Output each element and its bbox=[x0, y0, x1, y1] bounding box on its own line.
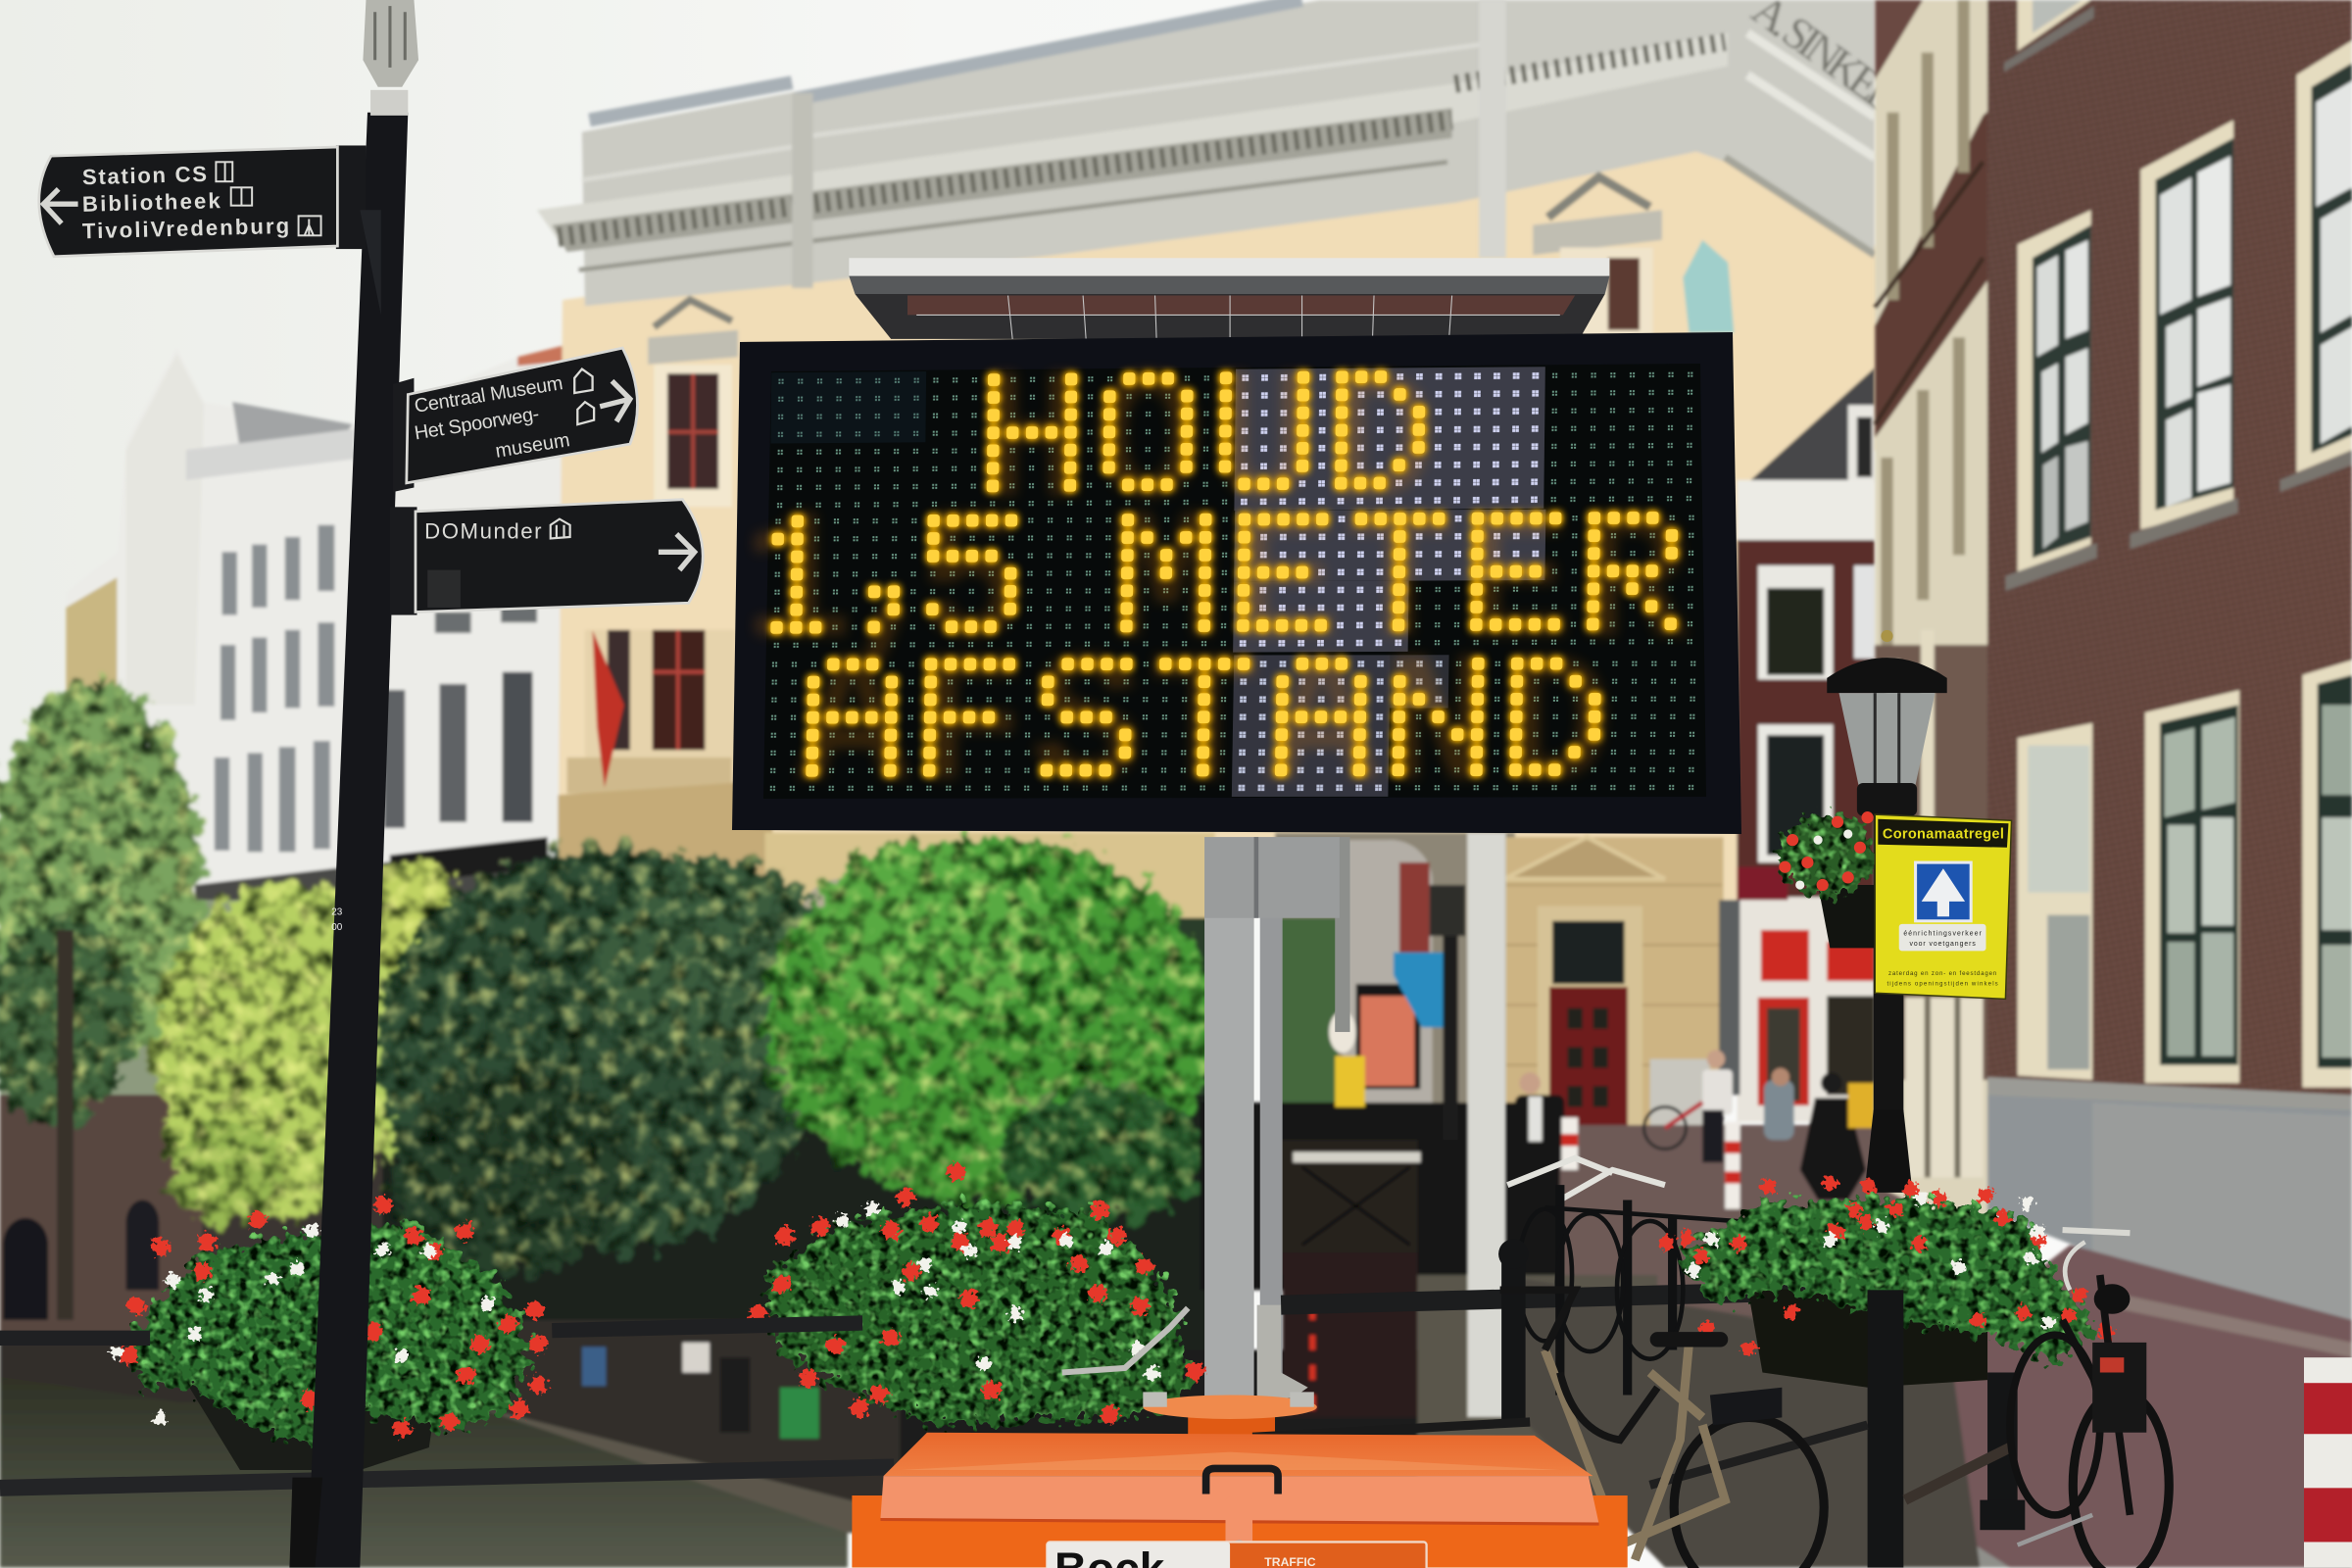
yellow corona measure sign bbox=[1875, 814, 2012, 999]
theatre grey upper storey bbox=[537, 0, 1875, 306]
led line: 1,5 METER bbox=[770, 512, 1678, 634]
led panel bbox=[763, 364, 1706, 799]
led line: HOUD bbox=[987, 370, 1426, 492]
post marking: 23 bbox=[331, 907, 343, 918]
sign header bbox=[1878, 819, 2008, 848]
destination names bbox=[413, 372, 571, 463]
solar panel above the sign bbox=[849, 258, 1609, 339]
canal water bbox=[0, 1377, 848, 1567]
destination names bbox=[82, 162, 289, 243]
destination names: Het Spoorweg- bbox=[413, 404, 541, 444]
orange trailer base bbox=[852, 1392, 1628, 1568]
sign header: Coronamaatregel bbox=[1883, 827, 2004, 843]
info panel, flag and street lamp bbox=[1329, 885, 1465, 1140]
destination names: Station CS bbox=[82, 162, 207, 189]
museum icon bbox=[551, 519, 570, 538]
lid reflection bbox=[900, 1452, 1560, 1470]
red and white bollard bbox=[2304, 1357, 2352, 1567]
black bicycles bbox=[2010, 1230, 2169, 1568]
name plate bbox=[1047, 1542, 1427, 1568]
post finial bbox=[363, 0, 418, 116]
left arrow bbox=[43, 189, 78, 223]
right arrow bbox=[659, 534, 695, 570]
signpost arm: Station CS bbox=[39, 145, 381, 315]
centre flower basket bbox=[758, 1171, 1196, 1425]
dim led matrix, line two zone bbox=[766, 509, 1701, 654]
brick texture bbox=[1987, 0, 2352, 1140]
LED message board bbox=[732, 332, 1741, 835]
destination names: Centraal Museum bbox=[413, 372, 564, 417]
led line: AFSTAND bbox=[806, 658, 1601, 777]
theatre cream wall bbox=[558, 135, 1878, 900]
mounting plate bbox=[1143, 1392, 1530, 1440]
post marking second line: 00 bbox=[331, 922, 343, 933]
dim led matrix, line three zone bbox=[762, 655, 1703, 797]
destination name: DOMunder bbox=[424, 518, 542, 543]
right arrow bbox=[600, 381, 630, 421]
right brick canal house bbox=[1500, 0, 2352, 1567]
trees bbox=[0, 682, 1218, 1275]
sign caption: éénrichtingsverkeer bbox=[1903, 930, 1983, 937]
signpost arm: DOMunder bbox=[390, 500, 703, 615]
hazy backdrop behind the left trees bbox=[0, 900, 390, 1102]
left flower basket bbox=[117, 1204, 538, 1470]
message glow text: 1,5METER bbox=[742, 481, 1689, 692]
message glow text bbox=[742, 341, 1689, 835]
cream pilaster section bbox=[1875, 0, 1995, 1245]
signpost arm: Centraal Museum bbox=[393, 348, 637, 492]
band under the sign bbox=[765, 832, 1515, 1117]
sign small print: zaterdag en zon- en feestdagen bbox=[1888, 970, 1996, 977]
lid handle bbox=[1206, 1468, 1278, 1568]
canal-side brick arches bbox=[0, 1095, 382, 1350]
theatre windows and pediments bbox=[558, 177, 1734, 900]
sloped lid top bbox=[884, 1433, 1592, 1476]
sign small print: tijdens openingstijden winkels bbox=[1886, 981, 1998, 988]
board frame bbox=[732, 332, 1741, 834]
pavement bbox=[1500, 1245, 2352, 1567]
one-way arrow board bbox=[1914, 861, 1973, 922]
lower row of windows bbox=[2018, 660, 2352, 1088]
lid seam bbox=[880, 1519, 1599, 1524]
upper row of windows bbox=[2004, 0, 2352, 591]
destination icons bbox=[216, 162, 321, 235]
white flagpole bbox=[1467, 0, 1506, 1417]
lid front bbox=[880, 1476, 1599, 1524]
dark undergrowth behind the trees bbox=[0, 1095, 1245, 1365]
message glow text: HOUD bbox=[977, 341, 1437, 552]
destination names: Bibliotheek bbox=[82, 188, 221, 217]
worn patch bbox=[427, 570, 461, 608]
plaza behind the support bbox=[1200, 1102, 1657, 1500]
red brick corner house bbox=[1719, 368, 1875, 1122]
museum icons bbox=[574, 369, 594, 424]
brick wall bbox=[1987, 0, 2352, 1140]
black signpost bbox=[289, 0, 418, 1567]
foreground bicycles bbox=[1500, 1230, 2169, 1568]
right flower basket bbox=[1666, 1184, 2106, 1388]
background bicycles bbox=[1507, 1158, 1755, 1395]
sign caption bbox=[1899, 924, 1986, 951]
railing posts bbox=[1498, 1239, 2025, 1567]
dim led matrix, line one zone bbox=[770, 366, 1700, 514]
lit amber leds bbox=[770, 370, 1678, 777]
canal quay with terrace bbox=[0, 1320, 900, 1533]
gold bicycle bbox=[1500, 1290, 1824, 1568]
sign small print bbox=[1886, 970, 1998, 988]
handrails bbox=[0, 1290, 1851, 1488]
sign support mast bbox=[1204, 837, 1350, 1401]
stone portal with red door bbox=[1504, 837, 1724, 1137]
tree trunk bbox=[57, 930, 74, 1320]
hanging flower basket by the lantern bbox=[1779, 813, 1875, 948]
stone plinth bbox=[1987, 1077, 2352, 1321]
street and ground beyond the bridge bbox=[1500, 1125, 1995, 1320]
message glow text: AFSTAND bbox=[797, 624, 1612, 835]
destination names: museum bbox=[494, 429, 571, 463]
pedestrians on the far quay bbox=[1515, 1050, 1875, 1209]
destination names: TivoliVredenburg bbox=[82, 214, 289, 243]
dark terrace behind the flower basket bbox=[840, 1350, 1500, 1515]
box body bbox=[852, 1495, 1628, 1567]
sign caption: voor voetgangers bbox=[1909, 941, 1976, 948]
street lantern bbox=[1827, 630, 1947, 1193]
left white townhouses bbox=[66, 342, 588, 960]
